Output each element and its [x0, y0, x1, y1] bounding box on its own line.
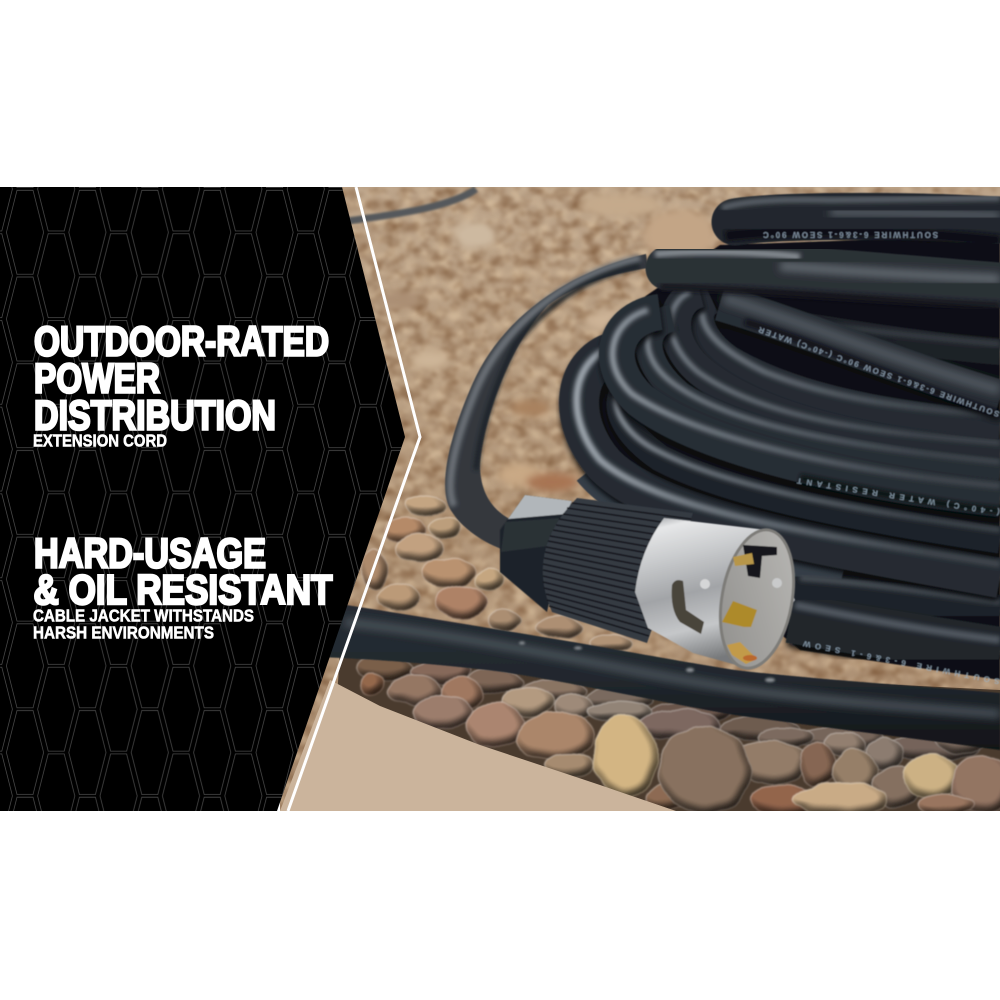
wood plank: [280, 680, 676, 811]
loop cable: [445, 254, 648, 552]
cable coil: [577, 198, 1000, 686]
front top strand: [655, 252, 1000, 306]
printed jacket text: [757, 230, 1000, 686]
plug connector: [500, 495, 804, 674]
subheading: cable jacket: CABLE JACKET WITHSTANDS: [33, 606, 254, 626]
heading: hard-usage and oil resistant: [34, 530, 332, 613]
subheading: cable jacket: [33, 606, 254, 642]
inner ring between loops: [648, 318, 1000, 472]
top coil ring: [722, 198, 1000, 241]
panel: black chevron with honeycomb pattern: [0, 187, 405, 811]
plug inner face: [718, 528, 796, 670]
heading: hard-usage and oil resistant: HARD-USAGE: [34, 530, 266, 576]
upper coil loop: [613, 310, 1000, 511]
lower right band: [780, 578, 1000, 611]
gravel ground: [280, 187, 1000, 811]
chevron white outline: [288, 187, 420, 811]
heading: hard-usage and oil resistant: & OIL RESISTANT: [34, 566, 332, 613]
printed jacket text: SOUTHWIRE 6-3&6-1 SEOW 90°C (-40°C) WATER: [757, 325, 1000, 419]
heading: outdoor-rated power distribution: POWER: [34, 354, 160, 402]
subheading: extension cord: EXTENSION CORD: [33, 430, 167, 450]
subheading: cable jacket: HARSH ENVIRONMENTS: [33, 622, 214, 642]
photo: coiled extension cord on gravel: [280, 187, 1000, 816]
near gravel stones: [330, 494, 1000, 816]
middle coil loop: [671, 292, 1000, 455]
plug ribbed collar: [543, 498, 693, 643]
inner strand: [700, 300, 1000, 425]
text strand: [720, 298, 1000, 414]
heading: outdoor-rated power distribution: DISTRIBUTION: [34, 392, 276, 438]
printed jacket text: SOUTHWIRE 6-3&6-1 SEOW: [802, 639, 1000, 686]
heading: outdoor-rated power distribution: OUTDOOR-RATED: [34, 318, 329, 365]
outer coil loop: [577, 349, 1000, 578]
bottom coil band: [790, 605, 1000, 652]
lower strand: [590, 470, 840, 585]
printed jacket text: SOUTHWIRE 6-3&6-1 SEOW 90°C: [763, 230, 938, 239]
plug hex nut: [500, 495, 572, 612]
back strand: [800, 322, 1000, 352]
text block: hard-usage: [33, 530, 332, 642]
inner lower strand: [616, 385, 1000, 540]
plug metal shell: [635, 518, 795, 668]
printed jacket text: (-40°C) WATER RESISTANT: [796, 476, 1000, 517]
distant cable: [348, 189, 476, 221]
heading: outdoor-rated power distribution: [34, 318, 329, 438]
front cable: [320, 604, 1000, 750]
text block: outdoor-rated: [33, 318, 329, 450]
